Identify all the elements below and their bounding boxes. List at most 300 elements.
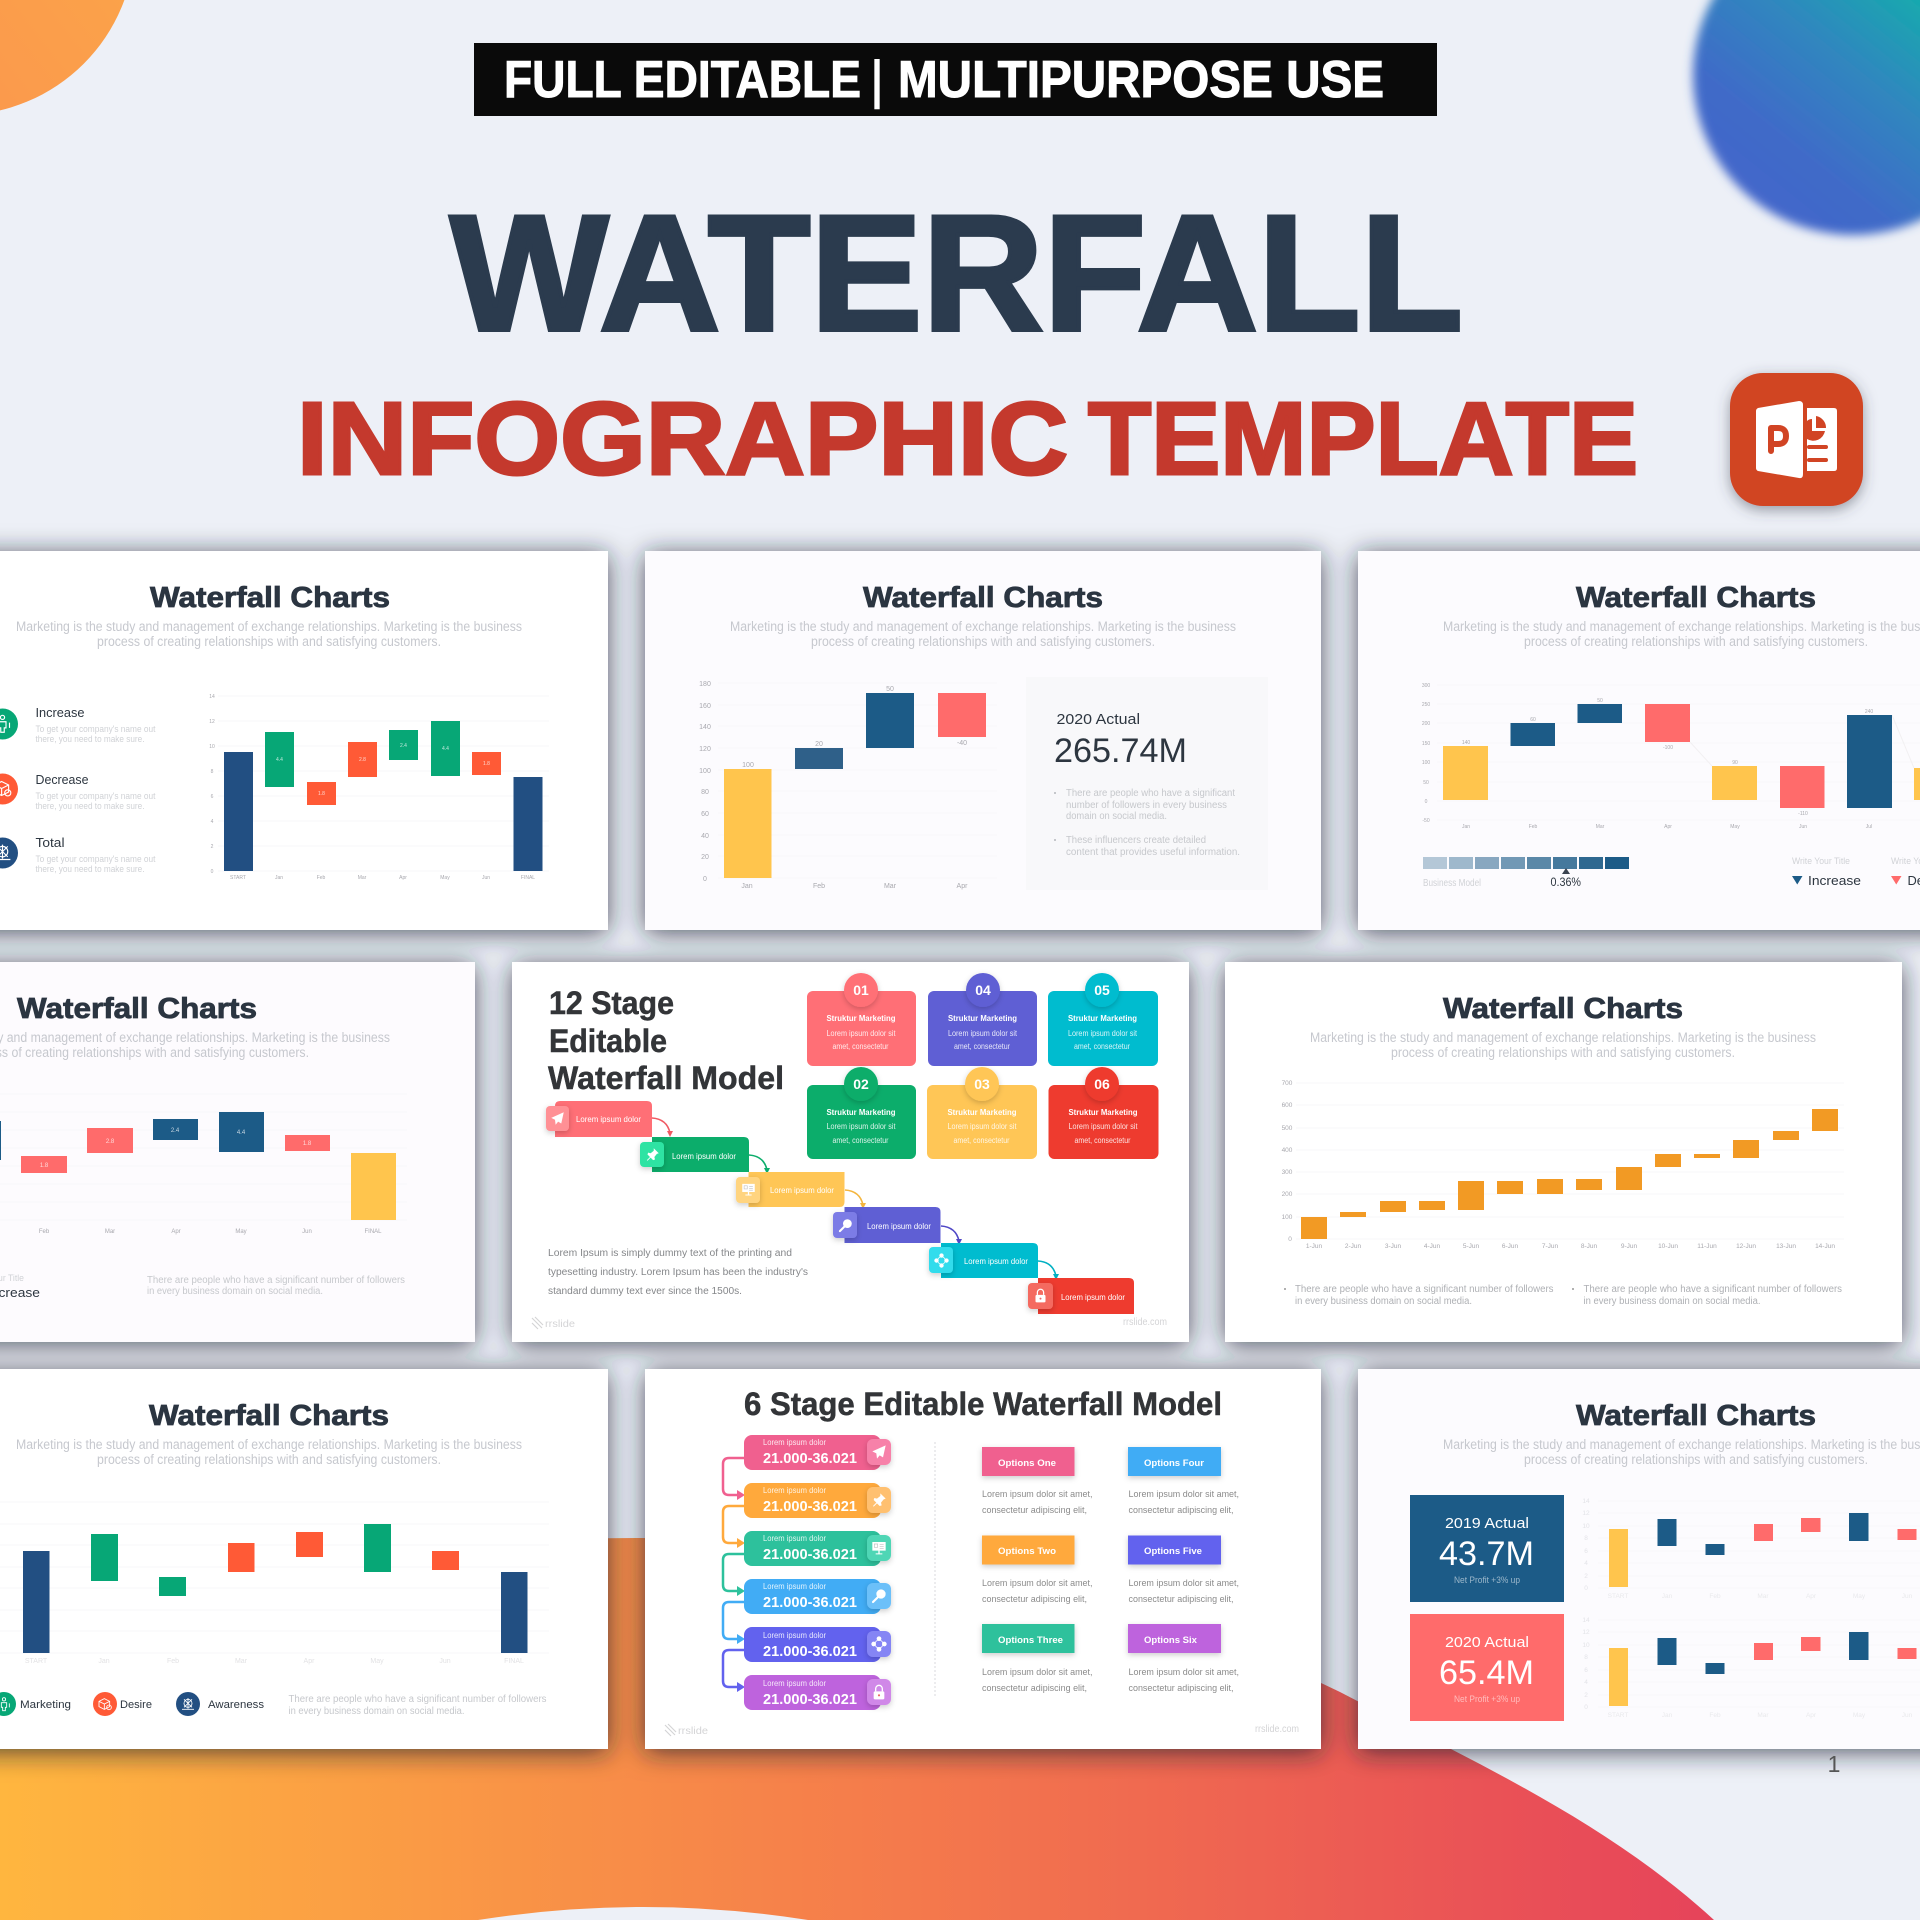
panel: 2020 actual stat: 2020 Actual <box>1056 711 1140 728</box>
legend: increase and decrease <box>1792 856 1920 888</box>
waterfall chart: Feb <box>167 1658 179 1665</box>
mini waterfall chart: 2020: 2 <box>1584 1692 1588 1699</box>
waterfall chart: 10-Jun <box>1658 1243 1678 1250</box>
top banner <box>474 43 1437 116</box>
mini waterfall chart: 2019: 6 <box>1584 1548 1588 1555</box>
card 03 <box>927 1067 1037 1159</box>
bullet note left: There are people who have a significant number of followers <box>1295 1284 1554 1295</box>
subheading <box>0 1030 390 1060</box>
waterfall chart: 60 <box>1530 717 1536 723</box>
waterfall chart: 100 <box>742 762 754 769</box>
waterfall chart: 300 <box>1422 683 1430 689</box>
waterfall chart <box>699 681 997 890</box>
card 02: Struktur Marketing <box>826 1107 896 1117</box>
subheading: process of creating relationships with and satisfying customers. <box>1524 634 1868 649</box>
heading: 12 Stage <box>549 985 674 1021</box>
waterfall chart: 4.4 <box>237 1130 246 1136</box>
waterfall chart: Mar <box>884 883 897 890</box>
stat card: 2020 <box>1410 1614 1564 1721</box>
waterfall chart: 2.8 <box>359 757 366 763</box>
stage 2 <box>723 1483 891 1548</box>
option four: Options Four <box>1144 1458 1204 1469</box>
stair step 4: Lorem ipsum dolor <box>867 1221 931 1231</box>
waterfall chart: 50 <box>1423 780 1429 786</box>
legend: total <box>0 835 156 874</box>
stair step 2 <box>640 1137 770 1174</box>
card 04: Struktur Marketing <box>948 1013 1017 1023</box>
panel: 2020 actual stat <box>1026 677 1268 890</box>
waterfall chart: 2.4 <box>400 743 407 749</box>
mini waterfall chart: 2020: May <box>1853 1712 1866 1719</box>
panel: 2020 actual stat: number of followers in every business <box>1066 800 1227 811</box>
stage 1 <box>723 1435 891 1500</box>
waterfall chart: 500 <box>1282 1125 1293 1132</box>
note text: There are people who have a significant number of followers <box>147 1275 405 1286</box>
bottom gradient wave <box>0 1538 1714 1920</box>
waterfall chart: May <box>235 1229 247 1235</box>
option six: consectetur adipiscing elit, <box>1128 1683 1234 1694</box>
site url: rrslide.com <box>1255 1724 1299 1735</box>
waterfall chart <box>0 1502 549 1665</box>
heading: Waterfall Charts <box>150 582 390 614</box>
stat card: 2019: 43.7M <box>1439 1535 1534 1573</box>
waterfall chart: Feb <box>39 1229 50 1235</box>
option three: Lorem ipsum dolor sit amet, <box>982 1667 1092 1678</box>
option one: Options One <box>998 1458 1056 1469</box>
stage 5: Lorem ipsum dolor <box>763 1631 826 1640</box>
waterfall chart: Mar <box>1596 824 1605 830</box>
legend: total: To get your company's name out <box>36 854 156 864</box>
waterfall chart: Jun <box>439 1658 451 1665</box>
option three: Options Three <box>998 1635 1063 1646</box>
waterfall chart: 0 <box>211 869 214 875</box>
mini waterfall chart: 2019: 10 <box>1582 1523 1590 1530</box>
card 06: amet, consectetur <box>1074 1136 1131 1145</box>
card 03: 03 <box>974 1076 990 1092</box>
legend: increase and decrease: Write Your Title <box>1792 856 1850 866</box>
option three: consectetur adipiscing elit, <box>982 1683 1087 1694</box>
legend: marketing: Marketing <box>20 1699 71 1711</box>
description text: Lorem Ipsum is simply dummy text of the printing and <box>548 1248 792 1259</box>
subheading <box>1443 619 1920 649</box>
legend: increase: To get your company's name out <box>36 724 156 734</box>
card 01: Lorem ipsum dolor sit <box>826 1029 896 1038</box>
waterfall chart: Jan <box>741 883 753 890</box>
waterfall chart: 0 <box>1425 799 1428 805</box>
waterfall chart: 1.8 <box>303 1141 312 1147</box>
waterfall chart: 120 <box>699 746 711 753</box>
option three <box>982 1624 1092 1694</box>
stair step 3 <box>736 1172 866 1209</box>
card 02 <box>807 1067 916 1159</box>
site url: rrslide.com <box>1123 1317 1167 1328</box>
waterfall chart <box>1282 1080 1844 1250</box>
stair step 5: Lorem ipsum dolor <box>964 1256 1028 1266</box>
stage 6: Lorem ipsum dolor <box>763 1679 826 1688</box>
option six <box>1128 1624 1239 1694</box>
mini waterfall chart: 2020: Mar <box>1757 1712 1769 1719</box>
waterfall chart: START <box>230 875 246 881</box>
stage 3: 21.000-36.021 <box>763 1546 857 1563</box>
waterfall chart: Mar <box>358 875 367 881</box>
stair step 2: Lorem ipsum dolor <box>672 1151 736 1161</box>
business model scale: Business Model <box>1423 878 1481 889</box>
card 05 <box>1048 973 1158 1066</box>
subheading <box>16 1437 522 1467</box>
panel: 2020 actual stat: 265.74M <box>1054 732 1187 770</box>
waterfall chart: May <box>1730 824 1740 830</box>
bullet note left <box>1284 1284 1554 1307</box>
option four: consectetur adipiscing elit, <box>1128 1505 1234 1516</box>
panel: slide C, chart with business model scale <box>1358 551 1920 930</box>
note text <box>147 1275 405 1297</box>
waterfall chart: -100 <box>1663 745 1673 751</box>
page number: 1 <box>1828 1751 1840 1777</box>
stair step 4 <box>833 1207 962 1245</box>
waterfall chart: Feb <box>317 875 326 881</box>
stat card: 2020: Net Profit +3% up <box>1454 1694 1520 1704</box>
waterfall chart: Jul <box>1866 824 1872 830</box>
waterfall chart <box>1422 683 1920 830</box>
waterfall chart: 2.4 <box>171 1128 180 1134</box>
waterfall chart: -50 <box>1422 818 1430 824</box>
card 06 <box>1048 1067 1158 1159</box>
legend: desire <box>93 1692 152 1716</box>
option four <box>1128 1447 1239 1516</box>
card 04: amet, consectetur <box>954 1042 1010 1051</box>
legend: decrease: there, you need to make sure. <box>36 801 144 811</box>
option five: Options Five <box>1144 1546 1202 1557</box>
heading: Waterfall Charts <box>1576 1400 1816 1432</box>
panel: 2020 actual stat: There are people who have a significant <box>1066 788 1235 799</box>
mini waterfall chart: 2020: START <box>1608 1712 1628 1719</box>
heading <box>548 985 784 1096</box>
legend: marketing <box>0 1692 71 1716</box>
waterfall chart: 80 <box>701 789 709 796</box>
stair step 1: Lorem ipsum dolor <box>576 1114 641 1124</box>
panel: slide E, 12 stage editable waterfall model <box>512 962 1189 1342</box>
stage 2: 21.000-36.021 <box>763 1498 857 1515</box>
main title: WATERFALL <box>450 181 1463 365</box>
bullet note right: in every business domain on social media. <box>1584 1296 1760 1307</box>
panel: 2020 actual stat: domain on social media. <box>1066 811 1167 822</box>
top banner: FULL EDITABLE <box>504 51 861 109</box>
waterfall chart: 1.8 <box>318 791 325 797</box>
card 06: Lorem ipsum dolor sit <box>1068 1122 1138 1131</box>
waterfall chart: Jun <box>302 1229 312 1235</box>
description text: standard dummy text ever since the 1500s. <box>548 1286 742 1297</box>
panel: 2020 actual stat: content that provides useful information. <box>1066 847 1240 858</box>
option two: consectetur adipiscing elit, <box>982 1594 1087 1605</box>
waterfall chart: Feb <box>1529 824 1538 830</box>
option two: Lorem ipsum dolor sit amet, <box>982 1578 1092 1589</box>
waterfall chart: 100 <box>699 768 711 775</box>
heading: Waterfall Charts <box>149 1400 389 1432</box>
panel: 2020 actual stat: These influencers create detailed <box>1066 835 1206 846</box>
legend: awareness <box>176 1692 265 1716</box>
bullet note left: in every business domain on social media. <box>1295 1296 1472 1307</box>
card 05: Lorem ipsum dolor sit <box>1068 1029 1138 1038</box>
subheading <box>1310 1030 1816 1060</box>
decorative orange circle, top left <box>0 0 135 115</box>
waterfall chart: 200 <box>1422 721 1430 727</box>
waterfall chart: 4.4 <box>442 746 449 752</box>
waterfall chart: Apr <box>399 875 407 881</box>
legend: desire: Desire <box>120 1699 152 1711</box>
legend: total: Total <box>36 835 65 850</box>
waterfall chart: 40 <box>701 833 709 840</box>
heading: Waterfall Model <box>548 1060 784 1096</box>
stage 5: 21.000-36.021 <box>763 1643 857 1660</box>
logo <box>532 1317 575 1330</box>
stat card: 2020: 2020 Actual <box>1445 1634 1529 1651</box>
stat card: 2020: 65.4M <box>1439 1654 1534 1692</box>
waterfall chart: 0 <box>703 876 707 883</box>
waterfall chart: 2 <box>211 844 214 850</box>
option six: Options Six <box>1144 1635 1198 1646</box>
stage 4 <box>723 1579 891 1644</box>
waterfall chart: 0 <box>1288 1236 1292 1243</box>
option two <box>982 1536 1092 1605</box>
waterfall chart: 140 <box>699 724 711 731</box>
waterfall chart: 2.8 <box>106 1139 115 1145</box>
waterfall chart: Jan <box>98 1658 110 1665</box>
card 04: Lorem ipsum dolor sit <box>948 1029 1018 1038</box>
waterfall chart: 6 <box>211 794 214 800</box>
legend: increase and decrease: Increase <box>1808 873 1861 888</box>
subheading <box>730 619 1236 649</box>
subheading <box>16 619 522 649</box>
option six: Lorem ipsum dolor sit amet, <box>1128 1667 1239 1678</box>
subheading: process of creating relationships with and satisfying customers. <box>811 634 1155 649</box>
waterfall chart: 1.8 <box>40 1163 49 1169</box>
waterfall chart: Mar <box>235 1658 248 1665</box>
waterfall chart: 300 <box>1282 1169 1293 1176</box>
waterfall chart <box>209 694 549 881</box>
waterfall chart: 14-Jun <box>1815 1243 1835 1250</box>
waterfall chart: Jan <box>275 875 283 881</box>
waterfall chart: 2-Jun <box>1345 1243 1362 1250</box>
option one <box>982 1447 1092 1516</box>
subheading: process of creating relationships with and satisfying customers. <box>1391 1045 1735 1060</box>
stage 4: Lorem ipsum dolor <box>763 1582 826 1591</box>
option five: Lorem ipsum dolor sit amet, <box>1128 1578 1239 1589</box>
waterfall chart: 250 <box>1422 702 1430 708</box>
description text <box>548 1248 808 1297</box>
waterfall chart: 1-Jun <box>1306 1243 1323 1250</box>
subtitle: INFOGRAPHIC <box>297 381 1068 496</box>
logo: rrslide <box>678 1726 708 1737</box>
waterfall chart: Apr <box>1664 824 1672 830</box>
waterfall chart: Jan <box>1462 824 1470 830</box>
mini waterfall chart: 2020 <box>1582 1617 1920 1719</box>
waterfall chart: 4.4 <box>276 757 283 763</box>
stage 1: 21.000-36.021 <box>763 1450 857 1467</box>
stair step 3: Lorem ipsum dolor <box>770 1185 834 1195</box>
note text: in every business domain on social media. <box>288 1706 464 1717</box>
subheading: process of creating relationships with and satisfying customers. <box>97 1452 441 1467</box>
option two: Options Two <box>998 1546 1056 1557</box>
stage 4: 21.000-36.021 <box>763 1594 857 1611</box>
icon: PowerPoint logo <box>1730 373 1863 506</box>
option one: Lorem ipsum dolor sit amet, <box>982 1489 1092 1500</box>
waterfall chart <box>0 1094 407 1235</box>
waterfall chart: 50 <box>1597 698 1603 704</box>
top banner: | <box>872 51 882 109</box>
mini waterfall chart: 2019: May <box>1853 1593 1866 1600</box>
waterfall chart: 240 <box>1865 709 1873 715</box>
subheading: process of creating relationships with and satisfying customers. <box>97 634 441 649</box>
mini waterfall chart: 2019: Apr <box>1806 1593 1817 1600</box>
option four: Lorem ipsum dolor sit amet, <box>1128 1489 1239 1500</box>
heading: Waterfall Charts <box>1443 993 1683 1025</box>
stair step 1 <box>546 1101 673 1137</box>
subheading: Marketing is the study and management of exchange relationships. Marketing is the business <box>730 619 1236 634</box>
mini waterfall chart: 2019: Jun <box>1902 1593 1913 1600</box>
waterfall chart: 100 <box>1422 760 1430 766</box>
waterfall chart: Mar <box>105 1229 115 1235</box>
legend: increase: Increase <box>36 705 84 720</box>
legend: increase <box>0 1273 40 1300</box>
subheading: process of creating relationships with and satisfying customers. <box>1524 1452 1868 1467</box>
subheading: Marketing is the study and management of exchange relationships. Marketing is the business <box>1310 1030 1816 1045</box>
card 03: Struktur Marketing <box>948 1107 1016 1117</box>
slide shadows <box>0 551 1920 1749</box>
legend: total: there, you need to make sure. <box>36 864 144 874</box>
mini waterfall chart: 2020: 12 <box>1582 1629 1590 1636</box>
description text: typesetting industry. Lorem Ipsum has been the industry's <box>548 1267 808 1278</box>
waterfall chart: 600 <box>1282 1102 1293 1109</box>
waterfall chart: 90 <box>1732 760 1738 766</box>
mini waterfall chart: 2020: Apr <box>1806 1712 1817 1719</box>
waterfall chart: Jun <box>482 875 490 881</box>
waterfall chart: FINAL <box>521 875 535 881</box>
legend: decrease: To get your company's name out <box>36 791 156 801</box>
waterfall chart: May <box>370 1658 384 1665</box>
card 04 <box>928 973 1037 1066</box>
subheading: Marketing is the study and management of exchange relationships. Marketing is the business <box>16 1437 522 1452</box>
logo <box>665 1724 708 1737</box>
waterfall chart: Apr <box>304 1658 315 1665</box>
waterfall chart: 6-Jun <box>1502 1243 1519 1250</box>
waterfall chart: 180 <box>699 681 711 688</box>
card 06: 06 <box>1094 1076 1110 1092</box>
waterfall chart: May <box>440 875 450 881</box>
waterfall chart: 1.8 <box>483 761 490 767</box>
waterfall chart: Jun <box>1799 824 1807 830</box>
mini waterfall chart: 2019: 12 <box>1582 1510 1590 1517</box>
waterfall chart: 200 <box>1282 1191 1293 1198</box>
panel: slide G, chart with marketing legend <box>0 1369 608 1749</box>
stat card: 2019: 2019 Actual <box>1445 1515 1529 1532</box>
mini waterfall chart: 2020: Jun <box>1902 1712 1913 1719</box>
business model scale <box>1423 857 1629 889</box>
heading: Waterfall Charts <box>863 582 1103 614</box>
waterfall chart: 12 <box>209 719 215 725</box>
mini waterfall chart: 2020: 0 <box>1584 1704 1588 1711</box>
legend: increase <box>0 705 156 744</box>
note text: in every business domain on social media. <box>147 1286 323 1297</box>
subheading: Marketing is the study and management of exchange relationships. Marketing is the business <box>16 619 522 634</box>
waterfall chart: 14 <box>209 694 215 700</box>
waterfall chart: FINAL <box>364 1229 382 1235</box>
bullet note right <box>1572 1284 1842 1307</box>
subtitle: TEMPLATE <box>1088 381 1638 496</box>
mini waterfall chart: 2019: Jan <box>1662 1593 1673 1600</box>
waterfall chart: Apr <box>957 883 968 890</box>
waterfall chart: 400 <box>1282 1147 1293 1154</box>
legend: decrease <box>0 772 156 811</box>
mini waterfall chart: 2020: 8 <box>1584 1654 1588 1661</box>
stage 3 <box>723 1531 891 1596</box>
stage 3: Lorem ipsum dolor <box>763 1534 826 1543</box>
mini waterfall chart: 2019: Feb <box>1709 1593 1721 1600</box>
card 06: Struktur Marketing <box>1068 1107 1138 1117</box>
mini waterfall chart: 2020: Jan <box>1662 1712 1673 1719</box>
stair step 6 <box>1028 1278 1134 1314</box>
legend: awareness: Awareness <box>208 1699 265 1711</box>
note text: There are people who have a significant number of followers <box>288 1694 546 1705</box>
decorative blue circle, top right <box>1693 0 1920 235</box>
option five <box>1128 1536 1239 1605</box>
panel: slide F, orange waterfall chart <box>1225 962 1902 1342</box>
heading: 6 Stage Editable Waterfall Model <box>744 1386 1222 1422</box>
mini waterfall chart: 2019: 2 <box>1584 1573 1588 1580</box>
waterfall chart: 5-Jun <box>1463 1243 1480 1250</box>
stair step 5 <box>929 1243 1059 1280</box>
note text <box>288 1694 546 1717</box>
waterfall chart: 8 <box>211 769 214 775</box>
stage 5 <box>723 1627 891 1692</box>
waterfall chart: 9-Jun <box>1621 1243 1638 1250</box>
waterfall chart: 60 <box>701 811 709 818</box>
waterfall chart: 150 <box>1422 741 1430 747</box>
stage 1: Lorem ipsum dolor <box>763 1438 826 1447</box>
stage 6 <box>744 1675 891 1710</box>
waterfall chart: Apr <box>171 1229 181 1235</box>
legend: decrease: Decrease <box>36 772 88 787</box>
mini waterfall chart: 2020: Feb <box>1709 1712 1721 1719</box>
waterfall chart: 3-Jun <box>1385 1243 1402 1250</box>
waterfall chart: 12-Jun <box>1736 1243 1756 1250</box>
mini waterfall chart: 2019: 4 <box>1584 1560 1588 1567</box>
card 03: Lorem ipsum dolor sit <box>948 1122 1017 1131</box>
waterfall chart: 700 <box>1282 1080 1293 1087</box>
mini waterfall chart: 2019: 8 <box>1584 1535 1588 1542</box>
card 02: 02 <box>853 1076 869 1092</box>
top banner: MULTIPURPOSE USE <box>898 51 1384 109</box>
option one: consectetur adipiscing elit, <box>982 1505 1087 1516</box>
waterfall chart: 20 <box>701 854 709 861</box>
waterfall chart: 50 <box>886 686 894 693</box>
card 01: amet, consectetur <box>832 1042 889 1051</box>
waterfall chart: 100 <box>1282 1214 1293 1221</box>
card 02: Lorem ipsum dolor sit <box>826 1122 896 1131</box>
stat card: 2019: Net Profit +3% up <box>1454 1575 1520 1585</box>
waterfall chart: 4-Jun <box>1424 1243 1441 1250</box>
card 03: amet, consectetur <box>954 1136 1010 1145</box>
waterfall chart: 20 <box>815 741 823 748</box>
heading: Editable <box>549 1023 667 1059</box>
card 02: amet, consectetur <box>832 1136 889 1145</box>
panel: slide H, 6 stage editable waterfall model <box>645 1369 1321 1749</box>
logo: rrslide <box>545 1319 575 1330</box>
waterfall chart: 7-Jun <box>1542 1243 1559 1250</box>
stage 6: 21.000-36.021 <box>763 1691 857 1708</box>
panel: slide I, 2019 and 2020 actual <box>1358 1369 1920 1749</box>
mini waterfall chart: 2019: 14 <box>1582 1498 1590 1505</box>
waterfall chart: 140 <box>1462 740 1470 746</box>
